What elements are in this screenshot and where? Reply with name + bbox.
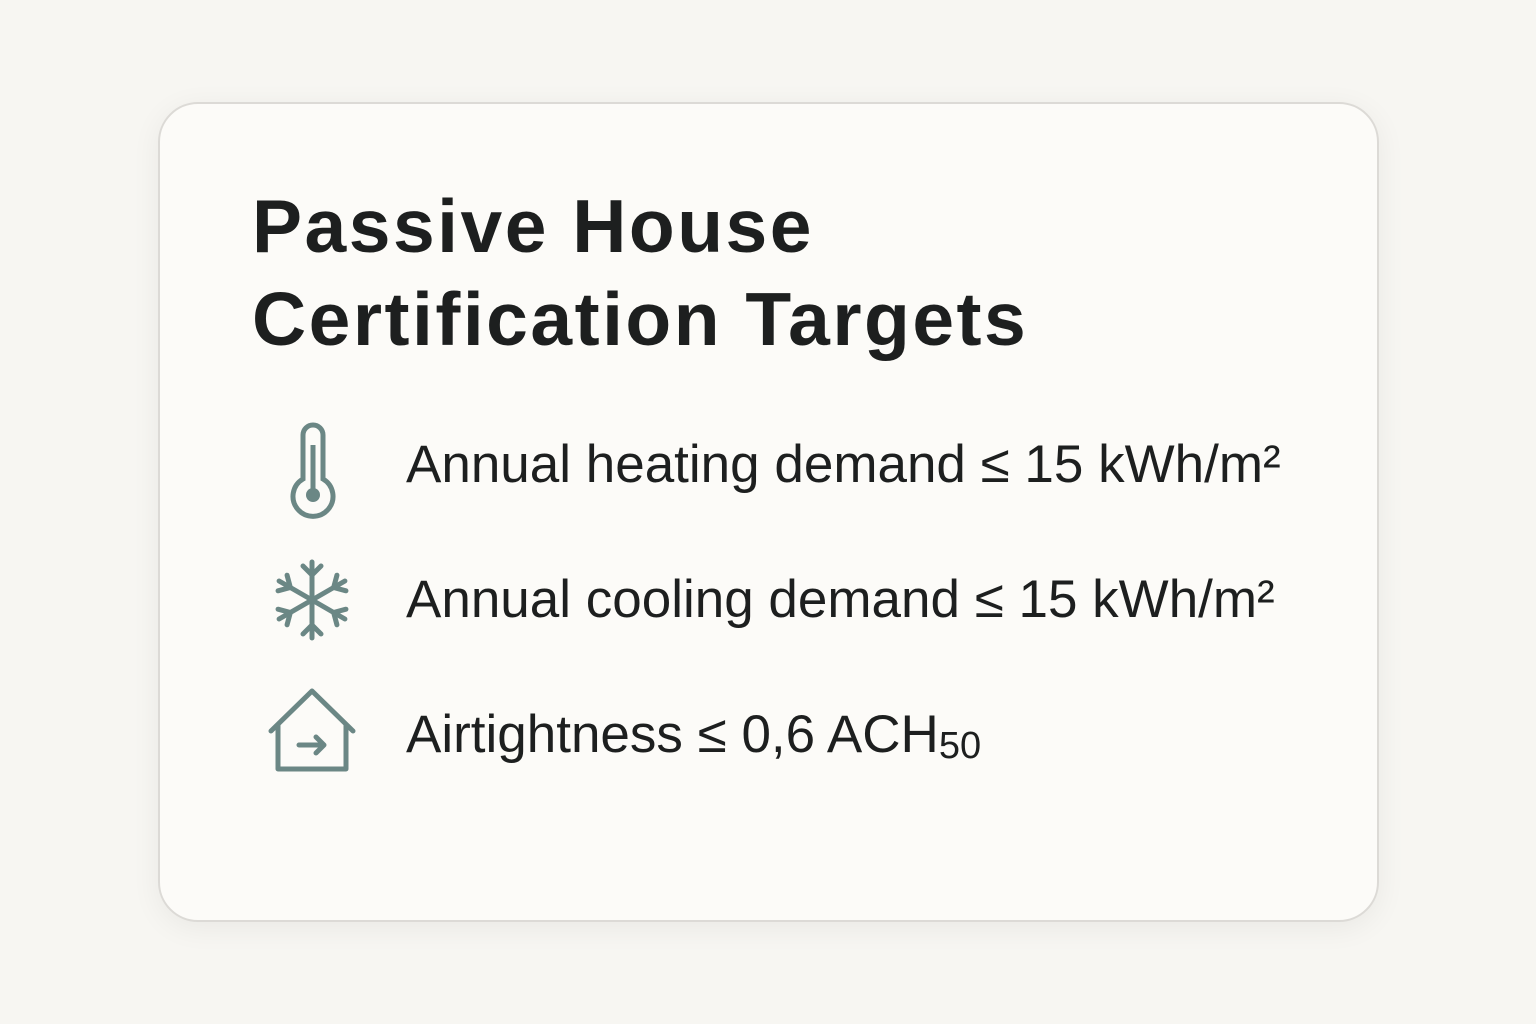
icon: snowflake: [276, 560, 348, 640]
title: [252, 184, 1028, 361]
text: cooling: Annual cooling demand ≤ 15 kWh/m²: [406, 570, 1275, 629]
title: Passive House: [252, 184, 814, 268]
title: Certification Targets: [252, 277, 1028, 361]
card panel: [158, 102, 1379, 922]
text: airtightness: Airtightness ≤ 0,6 ACH50: [406, 705, 981, 767]
icon: thermometer: [290, 422, 336, 519]
text: heating: Annual heating demand ≤ 15 kWh/m²: [406, 435, 1281, 494]
icon: house with arrow: [268, 688, 356, 772]
